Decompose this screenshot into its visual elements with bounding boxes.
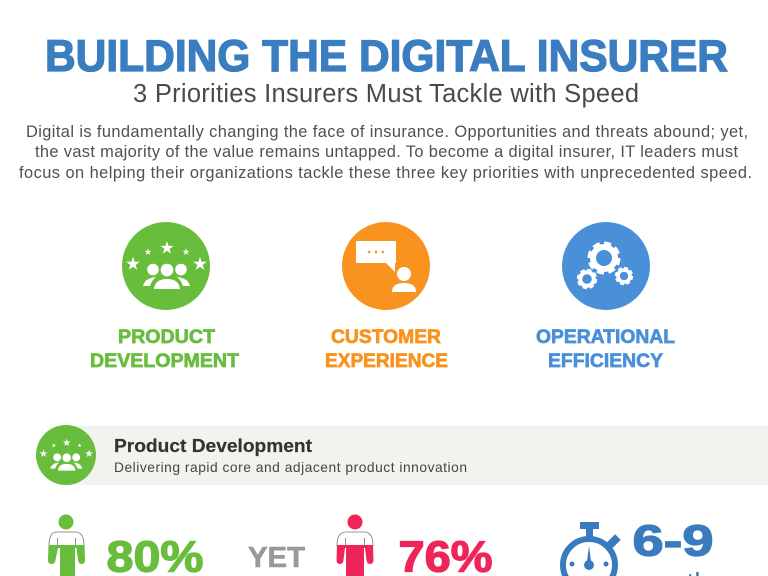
title: BUILDING THE DIGITAL INSURER: [45, 32, 728, 81]
intro text: [19, 123, 752, 182]
label: customer experience: EXPERIENCE: [325, 351, 448, 372]
icon: product development: [122, 222, 210, 310]
label: customer experience: CUSTOMER: [331, 327, 441, 348]
label: product development: DEVELOPMENT: [90, 351, 239, 372]
label: customer experience: [325, 327, 448, 372]
intro text: focus on helping their organizations tackle these three key priorities with unprecedented speed.: [19, 164, 752, 182]
intro text: Digital is fundamentally changing the face of insurance. Opportunities and threats abound; yet,: [26, 123, 748, 141]
icon: stopwatch: [563, 522, 621, 576]
icon: customer experience: [342, 222, 430, 310]
stat: 6-9: 6-9: [632, 516, 714, 566]
label: operational efficiency: EFFICIENCY: [548, 351, 663, 372]
label: operational efficiency: OPERATIONAL: [536, 327, 675, 348]
icon: operational efficiency: [562, 222, 650, 310]
icon: red person 76%: [336, 514, 374, 576]
section header icon: [36, 425, 96, 485]
section description: Delivering rapid core and adjacent product innovation: [114, 460, 467, 475]
label: product development: [90, 327, 239, 372]
subtitle: 3 Priorities Insurers Must Tackle with Speed: [133, 80, 639, 108]
section heading: Product Development: [114, 436, 312, 456]
label: YET: YET: [248, 542, 305, 574]
label: product development: PRODUCT: [118, 327, 215, 348]
icon: green person 80%: [48, 514, 85, 576]
label: operational efficiency: [536, 327, 675, 372]
intro text: the vast majority of the value remains untapped. To become a digital insurer, IT leaders must: [35, 143, 738, 161]
section header bar: [66, 426, 768, 485]
